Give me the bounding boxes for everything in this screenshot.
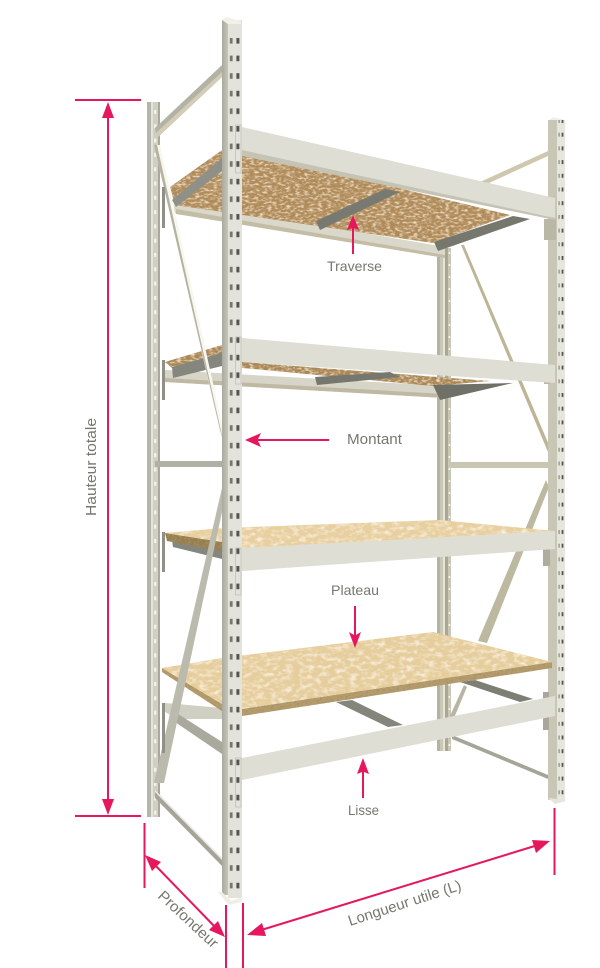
top shelf cross-member right bbox=[434, 216, 530, 251]
second shelf cross-member right bbox=[433, 383, 513, 400]
top shelf bbox=[170, 127, 555, 258]
bottom shelf beam bbox=[242, 696, 555, 780]
bottom shelf board bbox=[162, 632, 552, 709]
label: Hauteur totale: Hauteur totale bbox=[83, 418, 100, 516]
third shelf beam bbox=[242, 531, 555, 571]
bottom shelf cross-member right bbox=[460, 680, 533, 702]
third shelf cross-member bbox=[172, 540, 222, 559]
bottom shelf bbox=[162, 632, 555, 780]
third shelf bbox=[165, 520, 555, 571]
front-left upright bbox=[218, 17, 243, 905]
second shelf beam bbox=[242, 338, 555, 383]
label: Profondeur: Profondeur bbox=[154, 887, 221, 952]
label: Traverse: Traverse bbox=[327, 258, 382, 274]
top shelf board bbox=[170, 150, 510, 243]
top shelf back beam bbox=[174, 200, 445, 258]
label: Longueur utile (L): Longueur utile (L) bbox=[346, 877, 463, 930]
bottom shelf board edge bbox=[162, 662, 552, 716]
third shelf board bbox=[165, 520, 555, 549]
annotation arrow: Montant bbox=[245, 433, 329, 447]
label: Lisse: Lisse bbox=[348, 802, 379, 818]
back-right upright bbox=[437, 248, 451, 751]
second shelf cross-member left bbox=[172, 353, 222, 378]
second shelf back beam bbox=[165, 370, 445, 398]
bottom shelf cross-member middle bbox=[336, 700, 403, 727]
label: Plateau: Plateau bbox=[331, 582, 379, 598]
top shelf cross-member left bbox=[172, 158, 222, 207]
second shelf bbox=[165, 338, 555, 400]
label: Montant: Montant bbox=[347, 431, 403, 448]
right side bracing bbox=[450, 151, 549, 779]
left side bracing bbox=[154, 65, 225, 866]
annotation arrow: Plateau bbox=[349, 606, 361, 648]
dimension: total height bbox=[75, 99, 141, 817]
annotation arrow: Lisse bbox=[357, 758, 369, 798]
bottom shelf back members bbox=[165, 703, 222, 719]
right front upright bbox=[543, 117, 566, 804]
back-left upright bbox=[147, 102, 160, 817]
second shelf cross-member middle bbox=[315, 372, 400, 385]
dimension: usable length bbox=[242, 808, 556, 968]
third shelf board edge bbox=[165, 533, 222, 551]
top shelf beam bbox=[242, 127, 555, 218]
second shelf board bbox=[165, 345, 490, 386]
dimension: depth bbox=[144, 823, 227, 968]
annotation arrow: Traverse bbox=[347, 215, 359, 254]
top shelf cross-member middle bbox=[316, 189, 400, 230]
